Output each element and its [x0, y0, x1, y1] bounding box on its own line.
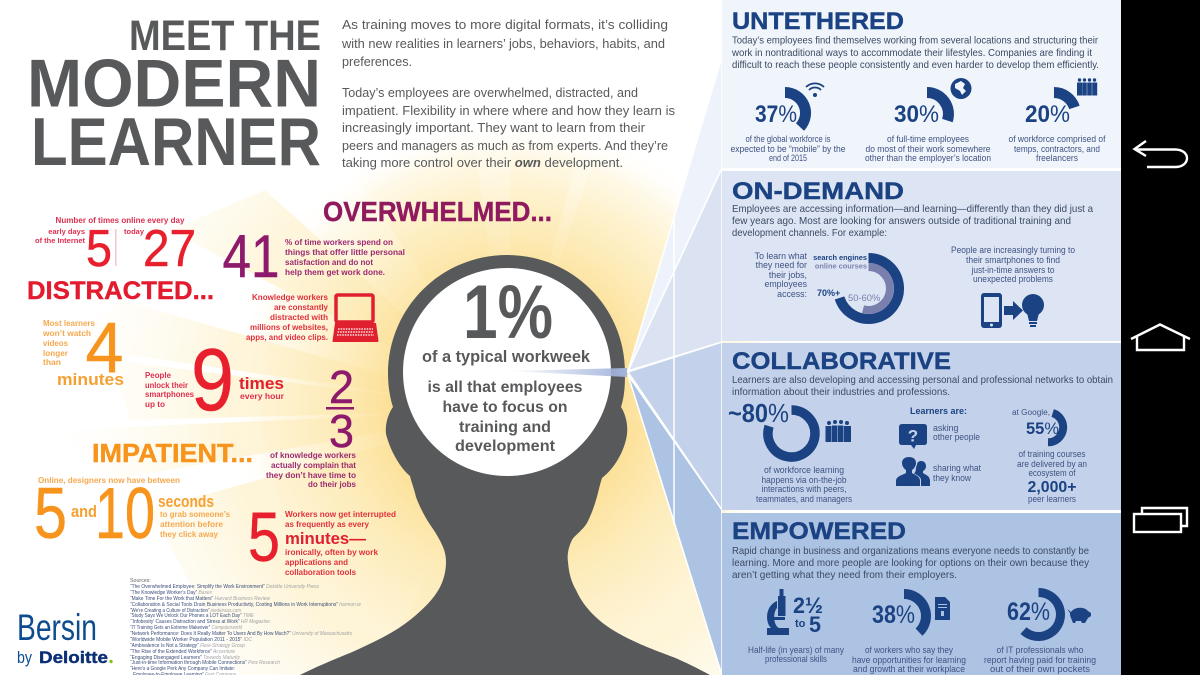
- learners are list: Learners are:: [910, 406, 967, 417]
- stat: google 55 percent: are delivered by an: [1017, 459, 1087, 469]
- stat: 80 percent on the job: ~80%: [728, 398, 789, 428]
- intro text: peers and managers as much as from experts. And they’re: [342, 139, 668, 153]
- caption: to learn what they need: access:: [777, 289, 807, 299]
- intro text: taking more control over their own development.: [342, 156, 623, 170]
- stat: two thirds: 3: [329, 405, 354, 457]
- intro text: impatient. Flexibility in where where and how they learn is: [342, 104, 675, 118]
- stat: 20 percent temps: [1008, 78, 1106, 163]
- stat: 5 and 10 seconds: [34, 474, 230, 554]
- stat: interrupted every 5 minutes: minutes—: [285, 529, 366, 548]
- stat: 37 percent mobile: [730, 83, 846, 163]
- stat: 62 percent: out of their own pockets: [990, 664, 1091, 674]
- stat: 62 percent: 62%: [1007, 598, 1050, 626]
- panel: on-demand: [722, 171, 1122, 341]
- stat: 20 percent temps: freelancers: [1036, 153, 1079, 163]
- caption: smartphones: [951, 245, 1075, 284]
- stat: interrupted every 5 minutes: collaboration tools: [285, 567, 356, 577]
- donut chart: search engines and online courses: 50-60%: [848, 292, 880, 303]
- collaborative body text: information about their industries and professions.: [732, 387, 950, 398]
- stat: 5 and 10 seconds: 5: [34, 474, 67, 554]
- stat: unlock smartphones 9 times: 9: [191, 330, 234, 429]
- stat: 80 percent on the job: [728, 398, 853, 504]
- empowered body text: Rapid change in business and organizations means everyone needs to constantly be: [732, 546, 1089, 557]
- stat: two thirds: do their jobs: [308, 479, 356, 489]
- caption: smartphones: People are increasingly turning to: [951, 245, 1075, 255]
- learners are list: sharing what: [933, 463, 982, 473]
- stat: google 55 percent: ecosystem of: [1028, 468, 1076, 478]
- intro text: Today’s employees are overwhelmed, distracted, and: [342, 86, 638, 100]
- empowered body text: learning. More and more people are looking for options on their own because they: [732, 558, 1090, 569]
- central callout: 1%: [422, 270, 591, 455]
- stat: 80 percent on the job: happens via on-the-job: [762, 475, 847, 485]
- stat: interrupted every 5 minutes: [248, 498, 396, 577]
- heading: impatient: IMPATIENT...: [92, 438, 253, 468]
- stat: 38 percent: of workers who say they: [865, 645, 954, 655]
- logo: Bersin by Deloitte: by: [17, 648, 32, 667]
- untethered body text: Today’s employees find themselves working from several locations and structuring their: [732, 36, 1099, 46]
- title: MEET THE: [129, 12, 321, 60]
- stat: unlock smartphones 9 times: People: [145, 370, 171, 380]
- caption: to learn what they need: they need for: [756, 260, 807, 270]
- stat: 38 percent: 38%: [872, 601, 915, 629]
- donut chart: search engines and online courses: search engines: [813, 253, 867, 262]
- sources list: “Here’s a Google Perk Any Company Can Imitate:: [130, 666, 235, 672]
- stat: unlock smartphones 9 times: times: [239, 374, 284, 393]
- title: [27, 12, 321, 180]
- is all that employees text: have to focus on: [442, 399, 568, 416]
- stat: two thirds: of knowledge workers: [270, 450, 356, 460]
- stat: knowledge workers distracted: millions of websites,: [250, 322, 328, 332]
- stat: half-life of skills: [748, 589, 845, 664]
- heading: collaborative: COLLABORATIVE: [732, 348, 951, 375]
- stat: unlock smartphones 9 times: smartphones: [145, 389, 194, 399]
- heading: empowered: EMPOWERED: [732, 518, 906, 545]
- stat: google 55 percent: 2,000+: [1028, 479, 1076, 496]
- collaborative body text: [732, 375, 1113, 398]
- intro text: preferences.: [342, 55, 412, 69]
- stat: 4 minutes: [42, 309, 124, 389]
- stat: times online every day: [35, 215, 196, 278]
- logo: Bersin by Deloitte: [17, 607, 113, 667]
- stat: google 55 percent: [1012, 408, 1087, 504]
- sources list: “Just-in-time Information through Mobile Connections” Pew Research: [130, 660, 280, 666]
- donut chart: search engines and online courses: [813, 253, 899, 319]
- stat: times online every day: 5: [86, 220, 112, 278]
- stat: 20 percent temps: 20%: [1025, 101, 1070, 128]
- stat: interrupted every 5 minutes: Workers now get interrupted: [285, 509, 396, 519]
- empowered body text: [732, 546, 1090, 581]
- caption: to learn what they need: employees: [764, 279, 808, 289]
- on-demand body text: [732, 204, 1093, 239]
- stat: 30 percent remote: other than the employer’s location: [865, 153, 991, 163]
- sources list: [130, 578, 361, 675]
- stat: google 55 percent: of training courses: [1018, 449, 1086, 459]
- logo: Bersin by Deloitte: Bersin: [17, 607, 97, 648]
- stat: 20 percent temps: of workforce comprised of: [1008, 134, 1106, 144]
- is all that employees text: development: [455, 438, 555, 455]
- stat: knowledge workers distracted: Knowledge workers: [252, 292, 328, 302]
- stat: 30 percent remote: 30%: [894, 101, 939, 128]
- sources list: “Study Says We Unlock Our Phones a LOT Each Day” TIME: [130, 613, 254, 619]
- sources list: “The Knowledge Worker’s Day” Basex: [130, 590, 212, 596]
- stat: half-life of skills: 5: [809, 612, 821, 637]
- stat: 4 minutes: minutes: [57, 370, 124, 389]
- funnel wedges: [628, 57, 722, 675]
- stat: 38 percent: [852, 594, 966, 674]
- sources list: “Collaboration & Social Tools Drain Business Productivity, Costing Millions in Work Interruptions” harmon.ie: [130, 602, 361, 608]
- stat: half-life of skills: 2½: [793, 593, 823, 618]
- heading: distracted: DISTRACTED...: [27, 277, 214, 305]
- untethered body text: work in nontraditional ways to accommodate their lifestyles. Companies are finding it: [731, 48, 1092, 59]
- stat: 62 percent: [984, 592, 1096, 674]
- stat: unlock smartphones 9 times: every hour: [240, 391, 285, 401]
- stat: 4 minutes: Most learners: [43, 318, 95, 328]
- navigation bar: [1121, 0, 1200, 675]
- sources list: “The Rise of the Extended Workforce” Accenture: [130, 649, 235, 655]
- stat: two thirds: actually complain that: [271, 460, 356, 470]
- stat: knowledge workers distracted: apps, and video clips.: [246, 332, 328, 342]
- stat: 4 minutes: longer: [43, 348, 69, 358]
- logo: Bersin by Deloitte: Deloitte: [39, 648, 108, 667]
- panel: empowered: [722, 513, 1122, 675]
- heading: on-demand: ON-DEMAND: [732, 178, 904, 205]
- stat: google 55 percent: 55%: [1026, 419, 1059, 438]
- panel: collaborative: [722, 343, 1122, 510]
- stat: 5 and 10 seconds: seconds: [158, 492, 214, 511]
- caption: smartphones: just-in-time answers to: [971, 265, 1055, 275]
- stat: 37 percent mobile: expected to be “mobile” by the: [730, 144, 846, 154]
- on-demand body text: development channels. For example:: [732, 228, 887, 239]
- stat: 5 and 10 seconds: they click away: [160, 529, 218, 539]
- donut chart: search engines and online courses: online courses: [815, 262, 867, 270]
- stat: unlock smartphones 9 times: up to: [145, 399, 165, 409]
- empowered body text: aren’t getting what they need from their employers.: [732, 570, 957, 581]
- stat: 62 percent: report having paid for training: [984, 655, 1096, 665]
- stat: half-life of skills: Half-life (in years) of many: [748, 645, 845, 655]
- head silhouette: [300, 255, 710, 675]
- stat: 41 percent: satisfaction and do not: [285, 257, 373, 267]
- sources list: “Worldwide Mobile Worker Population 2011 - 2015” IDC: [130, 637, 252, 643]
- stat: 41 percent: % of time workers spend on: [285, 237, 393, 247]
- learners are list: [896, 406, 982, 486]
- stat: unlock smartphones 9 times: unlock their: [145, 380, 189, 390]
- sources list: Sources:: [130, 578, 151, 584]
- sources list: “The Overwhelmed Employee: Simplify the Work Environment” Deloitte University Press: [130, 584, 319, 590]
- stat: half-life of skills: to: [795, 618, 806, 630]
- is all that employees text: [428, 379, 582, 455]
- stat: 41 percent: help them get work done.: [285, 267, 385, 277]
- sources list: “‘Infobesity’ Causes Distraction and Stress at Work” HR Magazine: [130, 619, 270, 625]
- beam from head to panels: [507, 368, 627, 377]
- stat: two thirds: [266, 361, 356, 489]
- learners are list: they know: [933, 473, 972, 483]
- stat: 38 percent: have opportunities for learning: [852, 655, 966, 665]
- of a typical workweek: of a typical workweek: [422, 347, 591, 366]
- stat: interrupted every 5 minutes: ironically, often by work: [285, 547, 378, 557]
- untethered body text: difficult to reach these people consistently and even harder to develop them efficiently.: [732, 60, 1099, 71]
- stat: 41 percent: [222, 223, 405, 290]
- stat: two thirds: they don’t have time to: [266, 470, 356, 480]
- stat: knowledge workers distracted: [246, 292, 328, 342]
- stat: 37 percent mobile: of the global workforce is: [746, 134, 831, 144]
- stat: two thirds: 2: [329, 361, 354, 413]
- icon: back arrow: [1134, 141, 1187, 167]
- is all that employees text: training and: [459, 419, 551, 436]
- stat: 41 percent: 41: [222, 223, 280, 290]
- caption: smartphones: their smartphones to find: [966, 255, 1060, 265]
- stat: 5 and 10 seconds: and: [71, 502, 97, 521]
- stat: 41 percent: things that offer little personal: [285, 247, 405, 257]
- heading: untethered: UNTETHERED: [732, 8, 904, 35]
- stat: 4 minutes: won’t watch: [42, 328, 91, 338]
- stat: interrupted every 5 minutes: as frequently as every: [285, 519, 369, 529]
- collaborative body text: Learners are also developing and accessing personal and professional networks to obtain: [732, 375, 1113, 386]
- stat: 5 and 10 seconds: to grab someone’s: [160, 509, 230, 519]
- icon: phone, arrow and lightbulb: [981, 293, 1044, 328]
- stat: 62 percent: of IT professionals who: [996, 645, 1084, 655]
- caption: to learn what they need: [755, 251, 808, 299]
- stat: half-life of skills: professional skills: [765, 654, 828, 664]
- icon: home: [1131, 324, 1190, 350]
- stat: 38 percent: and growth at their workplace: [853, 664, 965, 674]
- sources list: “Make Time For the Work that Matters” Harvard Business Review: [130, 596, 271, 602]
- sources list: “Engaging Disengaged Learners” Towards Maturity: [130, 655, 240, 661]
- stat: 37 percent mobile: 37%: [755, 101, 797, 128]
- sources list: “We’re Creating a Culture of Distraction” joedeiraus.com: [130, 608, 241, 614]
- intro text: with new realities in learners’ jobs, behaviors, habits, and: [341, 37, 665, 51]
- stat: 5 and 10 seconds: attention before: [160, 519, 223, 529]
- on-demand body text: few years ago. Most are looking for answers outside of traditional training and: [732, 216, 1071, 227]
- 1% figure: 1%: [463, 270, 553, 355]
- learners are list: other people: [933, 432, 980, 442]
- stat: times online every day: today: [124, 227, 145, 236]
- stat: 20 percent temps: temps, contractors, and: [1014, 144, 1100, 154]
- stat: google 55 percent: at Google,: [1012, 408, 1050, 417]
- learners are list: asking: [933, 423, 959, 433]
- title: MODERN: [27, 46, 321, 122]
- sunburst rays behind head: [60, 110, 790, 675]
- heading: overwhelmed: OVERWHELMED...: [323, 196, 552, 227]
- caption: to learn what they need: their jobs,: [769, 270, 807, 280]
- stat: 5 and 10 seconds: 10: [95, 474, 155, 554]
- stat: 4 minutes: videos: [43, 338, 68, 348]
- stat: knowledge workers distracted: distracted with: [270, 312, 328, 322]
- stat: times online every day: of the Internet: [35, 236, 86, 245]
- stat: 80 percent on the job: interactions with peers,: [762, 484, 846, 494]
- stat: knowledge workers distracted: are constantly: [274, 302, 328, 312]
- caption: to learn what they need: To learn what: [755, 251, 808, 261]
- intro text: As training moves to more digital formats, it’s colliding: [342, 18, 668, 32]
- stat: times online every day: early days: [48, 227, 85, 236]
- on-demand body text: Employees are accessing information—and learning—differently than they did just a: [732, 204, 1093, 215]
- stat: 5 and 10 seconds: Online, designers now have between: [38, 475, 180, 485]
- is all that employees text: is all that employees: [428, 379, 582, 396]
- sources list: “Ambivalence Is Not a Strategy” Flexi-Strategy Group: [130, 643, 245, 649]
- panel: untethered: [722, 0, 1122, 168]
- stat: interrupted every 5 minutes: applications and: [285, 557, 348, 567]
- stat: 80 percent on the job: teammates, and managers: [756, 494, 853, 504]
- caption: smartphones: unexpected problems: [973, 274, 1054, 284]
- donut chart: search engines and online courses: 70%+: [817, 288, 840, 298]
- stat: 37 percent mobile: end of 2015: [769, 153, 807, 163]
- intro text: [341, 18, 675, 170]
- stat: 4 minutes: than: [43, 357, 61, 367]
- intro text: increasingly important. They want to learn from their: [342, 121, 645, 135]
- stat: google 55 percent: peer learners: [1028, 494, 1077, 504]
- title: LEARNER: [31, 104, 321, 180]
- stat: 30 percent remote: of full-time employees: [887, 134, 970, 144]
- stat: 4 minutes: 4: [86, 309, 124, 388]
- stat: times online every day: 27: [143, 220, 196, 278]
- sources list: “IT Training Gets an Extreme Makeover” Computerworld: [130, 625, 243, 631]
- stat: times online every day: Number of times online every day: [56, 215, 185, 225]
- learners are list: ?: [908, 426, 918, 446]
- stat: 30 percent remote: do most of their work somewhere: [866, 144, 991, 154]
- stat: 80 percent on the job: of workforce learning: [764, 465, 844, 475]
- icon: laptop: [332, 295, 378, 342]
- stat: interrupted every 5 minutes: 5: [248, 498, 280, 576]
- sources list: “Network Performance: Does It Really Matter To Users And By How Much?” University of Massachusetts: [130, 631, 352, 637]
- untethered body text: [731, 36, 1099, 71]
- stat: 30 percent remote: [865, 78, 991, 163]
- stat: unlock smartphones 9 times: [145, 330, 285, 429]
- head white circle: [403, 268, 611, 476]
- icon: recent apps: [1134, 508, 1187, 532]
